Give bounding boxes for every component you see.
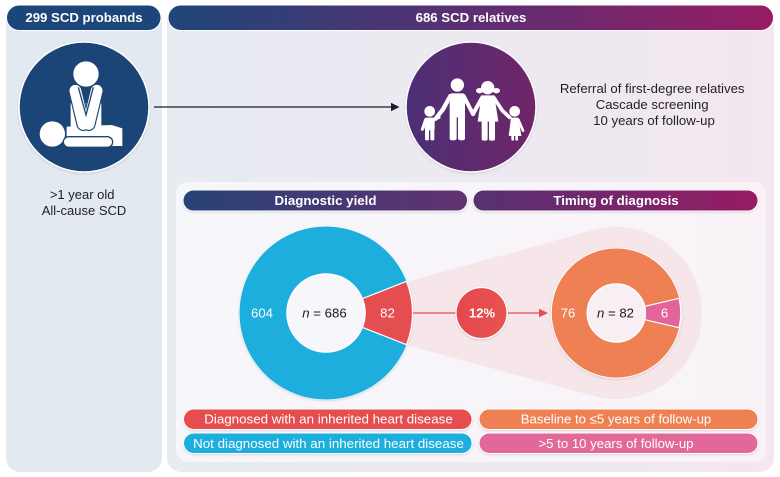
chart: diagnostic yield donut: 82 xyxy=(380,306,395,320)
text: study design: Cascade screening xyxy=(596,97,709,112)
legend: diagnosed: Diagnosed with an inherited heart disease xyxy=(204,412,453,426)
panel: results xyxy=(176,182,766,462)
arrow: wedge to 12 percent xyxy=(413,312,456,314)
heading: Diagnostic yield xyxy=(183,190,468,211)
callout: 12 percent: 12% xyxy=(469,306,495,320)
chart: timing donut: 6 xyxy=(661,306,668,320)
legend: baseline to 5 years: Baseline to ≤5 years of follow-up xyxy=(521,412,711,426)
text: inclusion criteria: All-cause SCD xyxy=(42,203,126,218)
chart: timing donut: n = 82 xyxy=(597,306,634,320)
chart: diagnostic yield donut: n = 686 xyxy=(302,306,347,320)
heading: 686 SCD relatives xyxy=(168,5,774,30)
panel: SCD probands xyxy=(6,5,162,472)
chart: diagnostic yield donut xyxy=(239,226,413,400)
heading: Diagnostic yield: Diagnostic yield xyxy=(275,193,376,208)
legend: baseline to 5 years xyxy=(479,409,758,430)
heading: Timing of diagnosis xyxy=(473,190,758,211)
legend: not diagnosed: Not diagnosed with an inherited heart disease xyxy=(193,436,464,451)
icon: CPR xyxy=(19,42,149,172)
legend: 5 to 10 years: >5 to 10 years of follow-up xyxy=(538,436,694,451)
heading: Timing of diagnosis: Timing of diagnosis xyxy=(553,193,679,208)
heading: 299 SCD probands xyxy=(6,5,161,30)
arrow: probands to relatives xyxy=(154,103,400,111)
text: inclusion criteria: >1 year old xyxy=(50,187,115,202)
heading: 686 SCD relatives: 686 SCD relatives xyxy=(416,10,526,25)
arrow: 12 percent to timing chart xyxy=(508,309,548,317)
text: study design: 10 years of follow-up xyxy=(593,113,715,128)
icon: family xyxy=(406,42,536,172)
panel: SCD relatives xyxy=(154,5,774,472)
text: study design: Referral of first-degree relatives xyxy=(560,81,745,96)
legend: 5 to 10 years xyxy=(479,433,758,454)
chart: timing donut xyxy=(551,248,682,378)
chart: diagnostic yield donut: 604 xyxy=(251,306,273,320)
callout: expansion from wedge to timing chart xyxy=(406,227,702,399)
callout: 12 percent xyxy=(456,288,507,338)
heading: 299 SCD probands: 299 SCD probands xyxy=(25,10,143,25)
legend: diagnosed xyxy=(184,409,472,430)
chart: timing donut: 76 xyxy=(561,306,575,320)
legend: not diagnosed xyxy=(184,433,472,454)
